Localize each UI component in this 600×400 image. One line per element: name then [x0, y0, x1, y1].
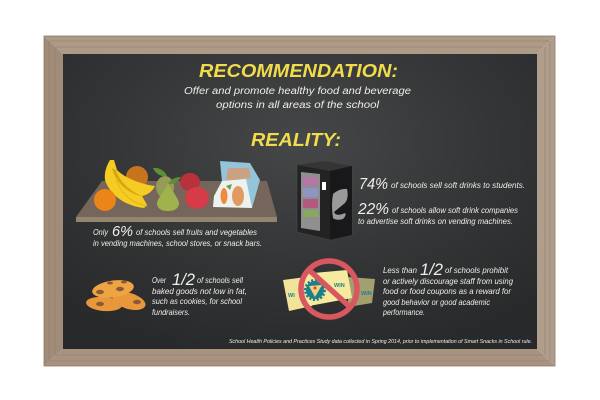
fruit statistic: of schools sell fruits and vegetables	[136, 227, 258, 237]
soft drink statistic: 22%: to advertise soft drinks on vending machines.	[358, 216, 513, 226]
baked goods statistic: Over	[152, 275, 167, 285]
recommendation text: options in all areas of the school	[216, 100, 380, 111]
food rewards statistic: Less than	[383, 265, 417, 275]
icon: prohibited food coupons	[283, 261, 375, 317]
soft drink statistic: 22%: of schools allow soft drink companies	[392, 205, 519, 215]
food rewards statistic: or actively discourage staff from using	[383, 276, 513, 286]
title: recommendation: RECOMMENDATION:	[199, 61, 398, 81]
recommendation text	[184, 86, 411, 111]
soft drink statistic: 22%	[357, 201, 519, 226]
icon: prohibited food coupons: WIN	[334, 283, 345, 289]
food rewards statistic: 1/2	[420, 260, 444, 279]
wooden frame	[44, 36, 555, 366]
soft drink statistic: 74%: 74%	[359, 176, 388, 193]
baked goods statistic: such as cookies, for school	[152, 296, 243, 306]
soft drink statistic: 22%: 22%	[357, 201, 389, 218]
food rewards statistic: food or food coupons as a reward for	[383, 286, 512, 296]
fruit statistic: in vending machines, school stores, or snack bars.	[93, 238, 262, 248]
footnote: School Health Policies and Practices Study data collected in Spring 2014, prior to implementation of Smart Snacks in School rule.	[229, 339, 532, 345]
icon: cookies	[85, 278, 148, 313]
fruit statistic: Only	[93, 227, 109, 237]
baked goods statistic: fundraisers.	[152, 307, 190, 317]
icon: shelf with fruit and snacks	[76, 160, 277, 222]
title: reality: REALITY:	[251, 130, 341, 150]
icon: prohibited food coupons: WIN	[361, 291, 372, 297]
icon: vending machine	[297, 161, 352, 240]
soft drink statistic: 74%: of schools sell soft drinks to students.	[391, 180, 525, 190]
baked goods statistic: baked goods not low in fat,	[152, 286, 247, 296]
food rewards statistic: of schools prohibit	[445, 265, 509, 275]
food rewards statistic	[382, 260, 513, 317]
baked goods statistic: of schools sell	[197, 275, 244, 285]
fruit statistic	[93, 223, 262, 248]
icon: prohibited food coupons: WI	[288, 293, 295, 299]
baked goods statistic	[152, 270, 247, 317]
food rewards statistic: performance.	[382, 307, 425, 317]
food rewards statistic: good behavior or good academic	[383, 297, 491, 307]
fruit statistic: 6%	[112, 223, 133, 240]
chalkboard panel	[63, 54, 537, 349]
recommendation text: Offer and promote healthy food and beverage	[184, 86, 411, 97]
baked goods statistic: 1/2	[172, 270, 196, 289]
soft drink statistic: 74%	[359, 176, 525, 193]
